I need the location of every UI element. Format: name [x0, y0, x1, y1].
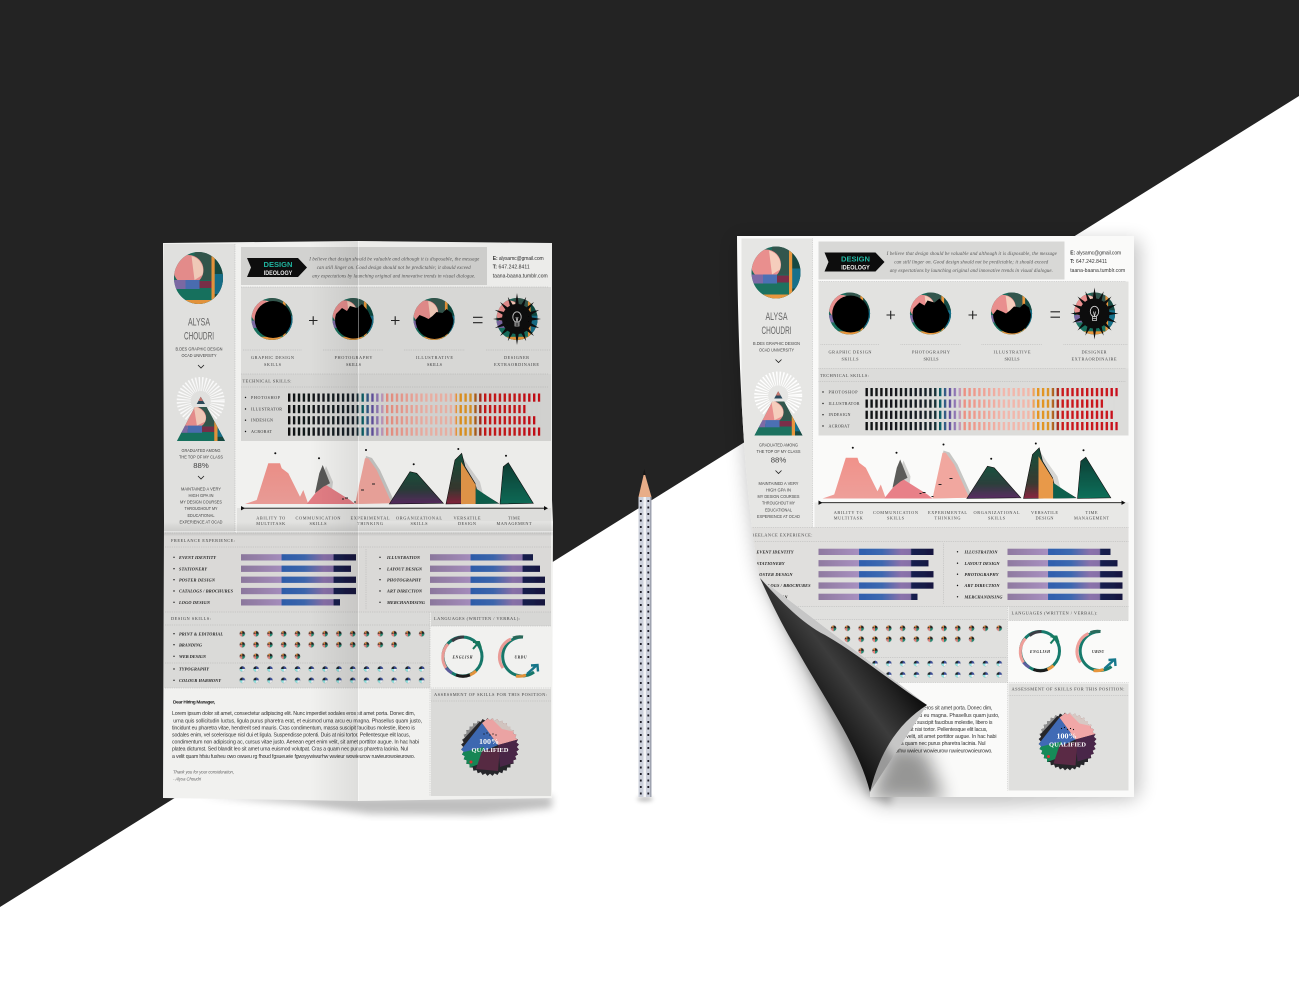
panel: skills equation: GRAPHIC DESIGN — [828, 350, 872, 354]
panel: skills equation — [826, 288, 1118, 362]
skill labels: MERCHANDISING — [386, 600, 426, 605]
panel: design skills — [171, 617, 425, 684]
heading: FREELANCE EXPERIENCE: — [171, 538, 235, 543]
skill labels: PHOTOSHOP — [251, 395, 281, 400]
heading: DESIGN SKILLS: — [171, 616, 211, 621]
panel: sidebar profile: ALYSA — [766, 311, 788, 323]
name — [184, 318, 214, 340]
panel: languages: URDU — [1092, 650, 1104, 654]
panel: technical skills: INDESIGN — [828, 412, 851, 417]
panel: technical skills — [820, 373, 1118, 432]
panel: assessment: 100% — [1056, 732, 1076, 740]
chart labels: VERSATILE — [454, 516, 481, 520]
panel: freelance experience: EVENT IDENTITY — [756, 549, 794, 554]
panel: skills equation: SKILLS — [1004, 356, 1020, 362]
bar chart: freelance bars — [241, 554, 545, 606]
pencil — [637, 469, 653, 802]
panel: design ideology header — [247, 256, 548, 280]
skill labels: STATIONERY — [179, 566, 207, 571]
contact details: T: 647.242.8411 — [493, 265, 530, 271]
equation labels: DESIGNER — [504, 355, 529, 360]
fold shading (left poster) — [163, 241, 553, 801]
skill labels: WEB DESIGN — [179, 654, 207, 659]
panel: cover letter — [172, 700, 422, 782]
panel: technical skills — [242, 378, 541, 437]
panel: sidebar profile — [748, 244, 807, 519]
skill labels — [174, 631, 223, 683]
equation labels: SKILLS — [427, 362, 443, 367]
chart labels: SKILLS — [410, 521, 428, 526]
chart labels: SKILLS — [310, 521, 327, 526]
ring labels: URDU — [514, 655, 527, 659]
skill labels: LAYOUT DESIGN — [386, 566, 423, 571]
degree text — [176, 348, 222, 357]
equation labels: SKILLS — [264, 362, 282, 367]
chart labels: ABILITY TO — [256, 516, 285, 520]
GPA text: EXPERIENCE AT OCAD — [180, 520, 223, 524]
GPA text: THROUGHOUT MY — [184, 506, 218, 511]
icon: qualified seal — [460, 717, 520, 777]
name: ALYSA — [188, 316, 210, 328]
panel: sidebar profile: HIGH GPA IN — [766, 488, 791, 492]
chart: soft skill mountains: DESIGN — [1036, 516, 1054, 520]
panel: sidebar profile: THROUGHOUT MY — [762, 500, 795, 506]
ideology statement — [308, 258, 480, 280]
panel: skills equation: PHOTOGRAPHY — [912, 350, 950, 354]
panel: freelance experience: LAYOUT DESIGN — [964, 561, 1000, 566]
banner — [247, 258, 307, 277]
letter body: urna quis sollicitudin luctus, ligula purus pharetra erat, et euismod urna arcu eu magna. Phasellus quam justo, — [173, 718, 422, 724]
skill labels: LOGO DESIGN — [178, 600, 211, 605]
sign-off: - Alysa Choudri — [173, 776, 202, 782]
salutation: Dear Hiring Manager, — [173, 700, 216, 706]
contact details: E: alysamc@gmail.com — [493, 256, 544, 262]
shadow cast by page curl — [870, 745, 945, 800]
GPA text: THE TOP OF MY CLASS — [179, 454, 223, 460]
paper sheet — [163, 241, 553, 801]
skill labels — [174, 555, 426, 605]
skill labels: EVENT IDENTITY — [178, 555, 216, 560]
equation labels: PHOTOGRAPHY — [334, 355, 372, 360]
pencil shadow — [637, 796, 653, 802]
skill labels: ILLUSTRATION — [386, 555, 421, 560]
degree text: B.DES GRAPHIC DESIGN — [176, 346, 222, 352]
chart: soft skill mountains: THINKING — [934, 516, 960, 520]
skill labels: ACROBAT — [251, 429, 272, 434]
letter body: a velit quam hfsiu fusheu owo owueu rg fhoud fgsueueie fgwsyywiwurhw wwieur wowieurow ruwieurowoieurowo. — [172, 754, 415, 760]
panel: cover letter: sodales enim, vel scelerisque nisl dui et ligula. Suspendisse potenti. Duis at nisi tortor. Pellentesque elit lacus, — [750, 727, 988, 733]
panel: freelance experience: PHOTOGRAPHY — [964, 572, 999, 577]
panel: technical skills: ACROBAT — [828, 424, 850, 428]
icon: chevrons — [198, 365, 204, 479]
panel: cover letter: Lorem ipsum dolor sit amet, consectetur adipiscing elit. Nunc imperdiet sodales eros sit amet porta. Donec dim, — [750, 706, 992, 712]
icon: portrait disc — [174, 252, 223, 304]
panel: sidebar profile: EXPERIENCE AT OCAD — [757, 514, 801, 519]
panel: sidebar profile: MY DESIGN COURSES — [758, 494, 800, 499]
panel: cover letter: platea dictumst. Sed blandit leo sit amet urna euismod volutpat. Cras a quam nec purus pharetra lacinia. Nul — [750, 741, 986, 747]
letter body: tincidunt eu pharetra vitae, hendrerit sed mauris. Cras condimentum, massa suscipit faucibus molestie, libero is — [172, 725, 415, 731]
icon: sunburst triangle — [172, 384, 230, 446]
panel: freelance experience: ART DIRECTION — [964, 583, 1000, 588]
panel: technical skills: TECHNICAL SKILLS: — [820, 373, 869, 378]
letter body: platea dictumst. Sed blandit leo sit amet urna euismod volutpat. Cras a quam nec purus pharetra lacinia. Nul — [172, 747, 408, 753]
pencil body — [638, 497, 652, 797]
chart: soft skill mountains: ORGANIZATIONAL — [974, 510, 1020, 515]
GPA text: MY DESIGN COURSES — [180, 500, 222, 504]
ring labels: ENGLISH — [452, 655, 473, 659]
panel: cover letter: a velit quam hfsiu fusheu owo owueu rg fhoud fgsueueie fgwsyywiwurhw wwieur wowieurow ruwieurowoieurowo. — [750, 748, 992, 754]
panel: languages: ENGLISH — [1029, 650, 1050, 654]
icon: qualified seal: 100% — [479, 737, 499, 746]
panel: sidebar profile: OCAD UNIVERSITY — [759, 348, 794, 352]
chart labels: MULTITASK — [256, 521, 286, 526]
GPA text: EDUCATIONAL — [188, 513, 215, 518]
skill labels: PRINT & EDITORIAL — [179, 631, 223, 636]
panel: freelance experience — [171, 538, 545, 606]
letter body: Lorem ipsum dolor sit amet, consectetur adipiscing elit. Nunc imperdiet sodales eros sit amet porta. Donec dim, — [172, 711, 415, 717]
panel: design skills — [748, 610, 1006, 685]
letter body: condimentum non adipiscing ac, cursus vitae justo. Aenean eget enim velit, sit amet porttitor augue. In hac habi — [172, 740, 419, 746]
skill labels: INDESIGN — [251, 418, 273, 423]
panel: cover letter: tincidunt eu pharetra vitae, hendrerit sed mauris. Cras condimentum, massa suscipit faucibus molestie, libero is — [750, 720, 993, 726]
pencil dots — [641, 500, 648, 796]
panel: languages: LANGUAGES (WRITTEN / VERBAL): — [1012, 610, 1098, 616]
chart: soft skill mountains — [818, 442, 1126, 520]
letter body: sodales enim, vel scelerisque nisl dui et ligula. Suspendisse potenti. Duis at nisi tortor. Pellentesque elit lacus, — [172, 733, 410, 739]
heading: ASSESSMENT OF SKILLS FOR THIS POSITION: — [434, 692, 547, 697]
panel: assessment: ASSESSMENT OF SKILLS FOR THIS POSITION: — [1012, 686, 1124, 692]
contact details: taana-baana.tumblr.com — [493, 273, 548, 279]
page curl — [760, 578, 927, 792]
panel: sidebar profile: MAINTAINED A VERY — [758, 481, 798, 486]
banner: IDEOLOGY — [264, 270, 293, 277]
equation labels: GRAPHIC DESIGN — [251, 355, 294, 360]
skill labels: ART DIRECTION — [386, 589, 423, 594]
equation labels: ILLUSTRATIVE — [416, 355, 453, 360]
panel: languages — [434, 616, 538, 676]
panel: design ideology header: any expectations by launching original and innovative trends in visual dialogue. — [890, 269, 1053, 274]
panel: freelance experience: POSTER DESIGN — [756, 572, 793, 577]
chart: soft skill mountains: COMMUNICATION — [873, 510, 918, 515]
panel: freelance experience: MERCHANDISING — [964, 594, 1003, 599]
panel: sidebar profile: EDUCATIONAL — [765, 508, 792, 512]
banner: DESIGN — [264, 260, 292, 269]
panel: design ideology header: DESIGN — [841, 254, 870, 264]
icon: equation discs — [248, 293, 541, 345]
chart: soft skill mountains: MANAGEMENT — [1074, 516, 1109, 520]
panel: design ideology header: can still linger on. Good design should not be predictable; it should exceed — [894, 261, 1049, 266]
panel: design ideology header: T: 647.242.8411 — [1070, 259, 1107, 265]
panel: freelance experience — [748, 532, 1122, 600]
panel: freelance experience: STATIONERY — [756, 561, 785, 566]
ideology statement: I believe that design should be valuable and although it is disposable, the message — [308, 258, 480, 262]
icon: language rings — [443, 637, 538, 676]
skill labels: COLOUR HARMONY — [179, 678, 221, 683]
ideology statement: any expectations by launching original and innovative trends in visual dialogue. — [312, 274, 475, 280]
icon: qualified seal: QUALIFIED — [472, 748, 509, 754]
skill labels: BRANDING — [178, 642, 203, 647]
equation labels: SKILLS — [346, 362, 362, 367]
panel: freelance experience: ILLUSTRATION — [964, 549, 998, 554]
panel: skills equation — [248, 293, 541, 367]
panels: grey section backgrounds — [164, 244, 551, 796]
name: CHOUDRI — [184, 330, 214, 342]
dot rating rows — [235, 624, 429, 690]
panel: sidebar profile: CHOUDRI — [762, 325, 792, 337]
chart: soft skill mountains: MULTITASK — [834, 516, 864, 520]
panel: sidebar profile: THE TOP OF MY CLASS — [756, 449, 800, 454]
chart: soft skill mountains: SKILLS — [887, 516, 905, 520]
chart labels: MANAGEMENT — [496, 521, 532, 526]
panel: cover letter: urna quis sollicitudin luctus, ligula purus pharetra erat, et euismod urna arcu eu magna. Phasellus quam justo, — [751, 713, 1000, 719]
degree text: OCAD UNIVERSITY — [182, 353, 216, 358]
panel: sidebar profile: 88% — [771, 458, 786, 464]
GPA text: MAINTAINED A VERY — [181, 486, 221, 492]
skill labels: CATALOGS / BROCHURES — [179, 589, 234, 594]
GPA text: HIGH GPA IN — [188, 493, 214, 498]
panel: sidebar profile: B.DES GRAPHIC DESIGN — [753, 341, 800, 346]
equation labels: EXTRAORDINAIRE — [494, 362, 539, 367]
panel: cover letter — [750, 706, 1000, 754]
poster: flat folded resume (left) — [163, 241, 553, 801]
skill labels: ILLUSTRATOR — [251, 406, 282, 412]
chart labels: ORGANIZATIONAL — [396, 516, 442, 520]
panel: freelance experience: FREELANCE EXPERIENCE: — [748, 532, 812, 538]
heading: TECHNICAL SKILLS: — [242, 378, 292, 384]
panel: cover letter: condimentum non adipiscing ac, cursus vitae justo. Aenean eget enim velit, sit amet porttitor augue. In hac habi — [750, 734, 996, 740]
skill labels — [246, 395, 282, 434]
panel: sidebar profile: GRADUATED AMONG — [759, 442, 798, 448]
ideology statement: can still linger on. Good design should not be predictable; it should exceed — [317, 266, 471, 271]
panel: skills equation: ILLUSTRATIVE — [994, 350, 1031, 354]
contact details — [493, 256, 548, 279]
chart: soft skill mountains: SKILLS — [988, 516, 1006, 520]
chart labels: DESIGN — [458, 521, 476, 526]
panel: assessment: QUALIFIED — [1049, 742, 1087, 748]
chart labels — [256, 516, 532, 525]
heading: LANGUAGES (WRITTEN / VERBAL): — [434, 616, 520, 621]
chart labels: THINKING — [357, 521, 383, 526]
panels: grey section backgrounds — [742, 238, 1128, 790]
panel: design ideology header: taana-baana.tumblr.com — [1070, 268, 1125, 274]
panel: skills equation: DESIGNER — [1082, 350, 1107, 354]
panel: freelance experience: LOGO DESIGN — [756, 594, 788, 599]
panel: technical skills: PHOTOSHOP — [828, 390, 858, 394]
paper sheet — [737, 236, 1134, 797]
panel: languages — [1012, 610, 1116, 671]
chart: soft skill mountains: EXPERIMENTAL — [928, 510, 967, 515]
panel: design ideology header: IDEOLOGY — [841, 264, 870, 272]
skill labels: PHOTOGRAPHY — [387, 577, 421, 582]
chart labels: EXPERIMENTAL — [350, 516, 390, 520]
poster: curled resume (right) — [737, 236, 1134, 800]
panel: sidebar profile — [174, 252, 225, 524]
chart: soft skill mountains: VERSATILE — [1031, 510, 1058, 515]
chart labels: TIME — [508, 516, 520, 520]
panel: skills equation: SKILLS — [924, 356, 939, 362]
panel: assessment — [1012, 686, 1124, 772]
shadow: left paper — [200, 796, 552, 815]
chart: soft skill mountains — [241, 448, 548, 526]
panel: assessment — [434, 692, 547, 777]
panel: design ideology header — [824, 250, 1125, 274]
ring labels — [452, 656, 527, 658]
equation labels — [251, 356, 539, 366]
panel: technical skills: ILLUSTRATOR — [828, 401, 860, 406]
panel: skills equation: SKILLS — [842, 356, 859, 362]
GPA text: GRADUATED AMONG — [182, 448, 221, 453]
chart: soft skill mountains: ABILITY TO — [834, 510, 863, 515]
shadow: right paper — [737, 240, 1140, 806]
bar chart: dashed skill bars — [288, 392, 541, 437]
panel: design ideology header: I believe that design should be valuable and although it is disposable, the message — [886, 252, 1058, 257]
chart labels: COMMUNICATION — [296, 516, 340, 520]
skill labels: POSTER DESIGN — [179, 577, 216, 582]
GPA text: 88% — [193, 463, 209, 470]
panel: design skills: DESIGN SKILLS: — [748, 610, 788, 616]
skill labels: TYPOGRAPHY — [179, 667, 209, 672]
panel: skills equation: EXTRAORDINAIRE — [1072, 356, 1117, 362]
panel: freelance experience: CATALOGS / BROCHURES — [756, 583, 811, 588]
letter body — [172, 711, 422, 760]
panel: design ideology header: E: alysamc@gmail.com — [1070, 250, 1121, 256]
GPA text — [179, 448, 223, 524]
sign-off — [173, 770, 234, 782]
sign-off: Thank you for your consideration, — [173, 770, 234, 774]
pencil wood tip — [638, 472, 652, 497]
chart: soft skill mountains: TIME — [1086, 510, 1098, 515]
